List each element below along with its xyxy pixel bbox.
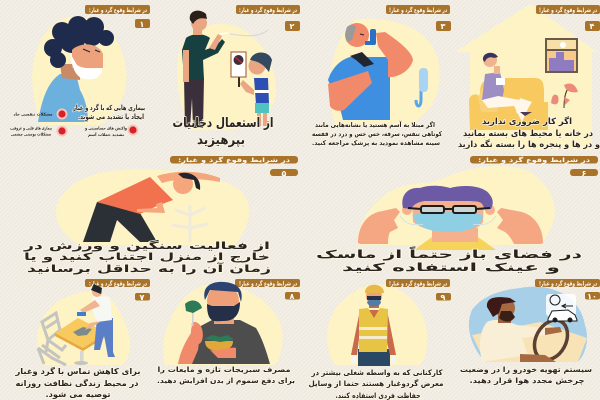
number tab 9 xyxy=(436,293,451,302)
header tab 7: در شرایط وقوع گرد و غبار: xyxy=(89,280,147,288)
header tab 2 xyxy=(236,5,300,14)
blue scene background xyxy=(469,287,587,362)
number tab 10: ۱۰ xyxy=(587,292,597,301)
caption 10: چرخش مجدد هوا قرار دهید. xyxy=(470,376,584,385)
number tab 3: ۳ xyxy=(441,22,446,31)
headline 4 xyxy=(458,116,600,150)
caption 8: مصرف سبزیجات تازه و مایعات را xyxy=(158,366,290,374)
icon: recirculation car xyxy=(546,294,577,322)
headline 5 xyxy=(22,239,271,275)
risk: allergy and asthma: تشدید حملات آسم xyxy=(88,132,125,137)
panel 9: protective equipment xyxy=(308,279,451,400)
panel 3: asthma xyxy=(312,5,451,147)
caption 9: کارکنانی که به واسطه شغلی بیشتر در xyxy=(311,368,443,377)
background blob 3 xyxy=(330,19,440,125)
background blob 6 xyxy=(358,166,555,245)
panel 1: related illnesses xyxy=(10,5,150,137)
header tab 5: در شرایط وقوع گرد و غبار: xyxy=(178,156,290,164)
illustration: window xyxy=(545,38,578,73)
caption 9: معرض گردوغبار هستند حتما از وسایل xyxy=(308,379,444,388)
caption 1: ایجاد یا تشدید می شوند. xyxy=(78,113,144,121)
risk: heart and skin: بیماری های قلبی و عروقی، xyxy=(10,126,52,130)
panel 6: mask and glasses xyxy=(316,156,598,274)
background blob 1 xyxy=(32,16,126,125)
header tab 6: در شرایط وقوع گرد و غبار: xyxy=(478,156,590,164)
headline 5: خارج از منزل اجتناب کنید و یا xyxy=(24,252,270,263)
illustration: table xyxy=(55,318,107,365)
risk: heart and skin: مشکلات پوستی چشمی xyxy=(11,132,51,136)
header tab 3: در شرایط وقوع گرد و غبار! xyxy=(389,6,447,14)
road and dashboard xyxy=(472,322,587,362)
headline 4: اگر کار ضروری ندارید xyxy=(482,116,572,127)
number tab 5 xyxy=(270,169,298,178)
illustration: inhaler device xyxy=(416,68,428,106)
illustration: chairs xyxy=(38,313,66,365)
background blob 2 xyxy=(177,24,276,130)
illustration: stretching person xyxy=(83,172,220,242)
illustration: plant xyxy=(551,83,578,108)
background blob 8 xyxy=(163,284,283,365)
header tab 9 xyxy=(386,279,450,288)
illustration: worker xyxy=(351,285,396,366)
caption 3: کوتاهی تنفس، سرفه، خس خس و درد در قفسه xyxy=(312,130,442,138)
panel 8: fresh food xyxy=(157,279,300,385)
illustration: man and cigarette xyxy=(182,11,268,128)
number tab 2 xyxy=(285,21,300,31)
risk: allergy and asthma xyxy=(84,124,138,137)
panel 5: avoid outdoor exercise xyxy=(22,156,298,275)
number tab 1: ۱ xyxy=(140,20,144,29)
number tab 7: ۷ xyxy=(140,293,145,302)
headline 2: از استعمال دخانیات xyxy=(172,116,274,131)
panel 4: stay home xyxy=(455,4,600,150)
number tab 8: ۸ xyxy=(290,292,295,301)
header tab 8 xyxy=(235,279,300,288)
risk: respiratory: مشکلات تنفسی حاد xyxy=(14,112,53,116)
headline 5: از فعالیت سنگین و ورزش در xyxy=(22,239,270,252)
number tab 3 xyxy=(436,21,451,31)
illustration: sofa and reader xyxy=(469,53,548,130)
caption 3: سینه مشاهده نمودید به پزشک مراجعه کنید. xyxy=(312,139,440,147)
number tab 6 xyxy=(570,169,598,178)
number tab 5: ۵ xyxy=(282,169,287,178)
caption 7: توصیه می شود. xyxy=(46,390,110,399)
risk: heart and skin xyxy=(10,126,68,136)
number tab 4 xyxy=(585,21,600,31)
header tab 1: در شرایط وقوع گرد و غبار: xyxy=(89,6,147,14)
caption 1: بیماری هایی که با گرد و غبار xyxy=(72,103,145,112)
headline 6: در فضای باز حتماً از ماسک xyxy=(316,246,583,261)
caption 10: سیستم تهویه خودرو را در وضعیت xyxy=(460,365,592,374)
background blob 9 xyxy=(327,284,427,365)
house shape xyxy=(455,4,597,150)
header tab 9: در شرایط وقوع گرد و غبار! xyxy=(389,280,447,288)
panel 10: car ventilation xyxy=(460,279,600,385)
caption 3 xyxy=(312,120,442,147)
background blob 5 xyxy=(56,169,249,245)
caption 9 xyxy=(308,368,444,400)
illustration: man with inhaler xyxy=(328,23,413,120)
caption 3: اگر مبتلا به آسم هستید یا نشانه‌هایی مانند xyxy=(315,120,435,129)
headline 2 xyxy=(172,116,274,148)
header tab 2: در شرایط وقوع گرد و غبار: xyxy=(239,6,297,14)
caption 7: در محیط زندگی نظافت روزانه xyxy=(16,378,138,388)
headline 2: بپرهیزید xyxy=(197,133,245,148)
number tab 2: ۲ xyxy=(290,22,295,31)
headline 6: و عینک استفاده کنید xyxy=(342,261,560,274)
panel 7: daily cleaning xyxy=(14,279,150,399)
illustration: man eating salad xyxy=(178,282,270,364)
header tab 5 xyxy=(170,156,298,164)
illustration: person with mask and glasses xyxy=(358,186,543,250)
illustration: man cleaning xyxy=(77,284,115,357)
caption 7 xyxy=(14,366,141,399)
number tab 6: ۶ xyxy=(582,169,587,178)
illustration: plant 5 xyxy=(172,205,208,242)
header tab 3 xyxy=(386,5,450,14)
number tab 4: ۴ xyxy=(590,22,595,31)
background blob 7 xyxy=(37,291,130,365)
caption 1 xyxy=(72,103,145,121)
header tab 6 xyxy=(470,156,598,164)
headline 4: در خانه یا محیط های بسته بمانید xyxy=(463,129,594,139)
caption 8 xyxy=(157,366,295,385)
caption 8: برای دفع سموم از بدن افزایش دهید. xyxy=(157,377,295,385)
caption 7: برای کاهش تماس با گرد وغبار xyxy=(14,366,141,377)
caption 9: حفاظت فردی استفاده کنند. xyxy=(336,391,420,400)
headline 5: زمان آن را به حداقل برسانید xyxy=(27,262,271,275)
headline 6 xyxy=(316,246,583,274)
header tab 8: در شرایط وقوع گرد و غبار! xyxy=(239,280,297,288)
risk: allergy and asthma: واکنش های حساسیتی و xyxy=(84,126,127,130)
illustration: masked person xyxy=(38,16,114,122)
number tab 8 xyxy=(285,292,300,301)
illustration: driver at steering wheel xyxy=(480,297,574,366)
caption 10 xyxy=(460,365,592,385)
illustration: boy with sign xyxy=(231,52,272,126)
number tab 9: ۹ xyxy=(441,293,446,302)
panel 2: no smoking xyxy=(172,5,300,148)
